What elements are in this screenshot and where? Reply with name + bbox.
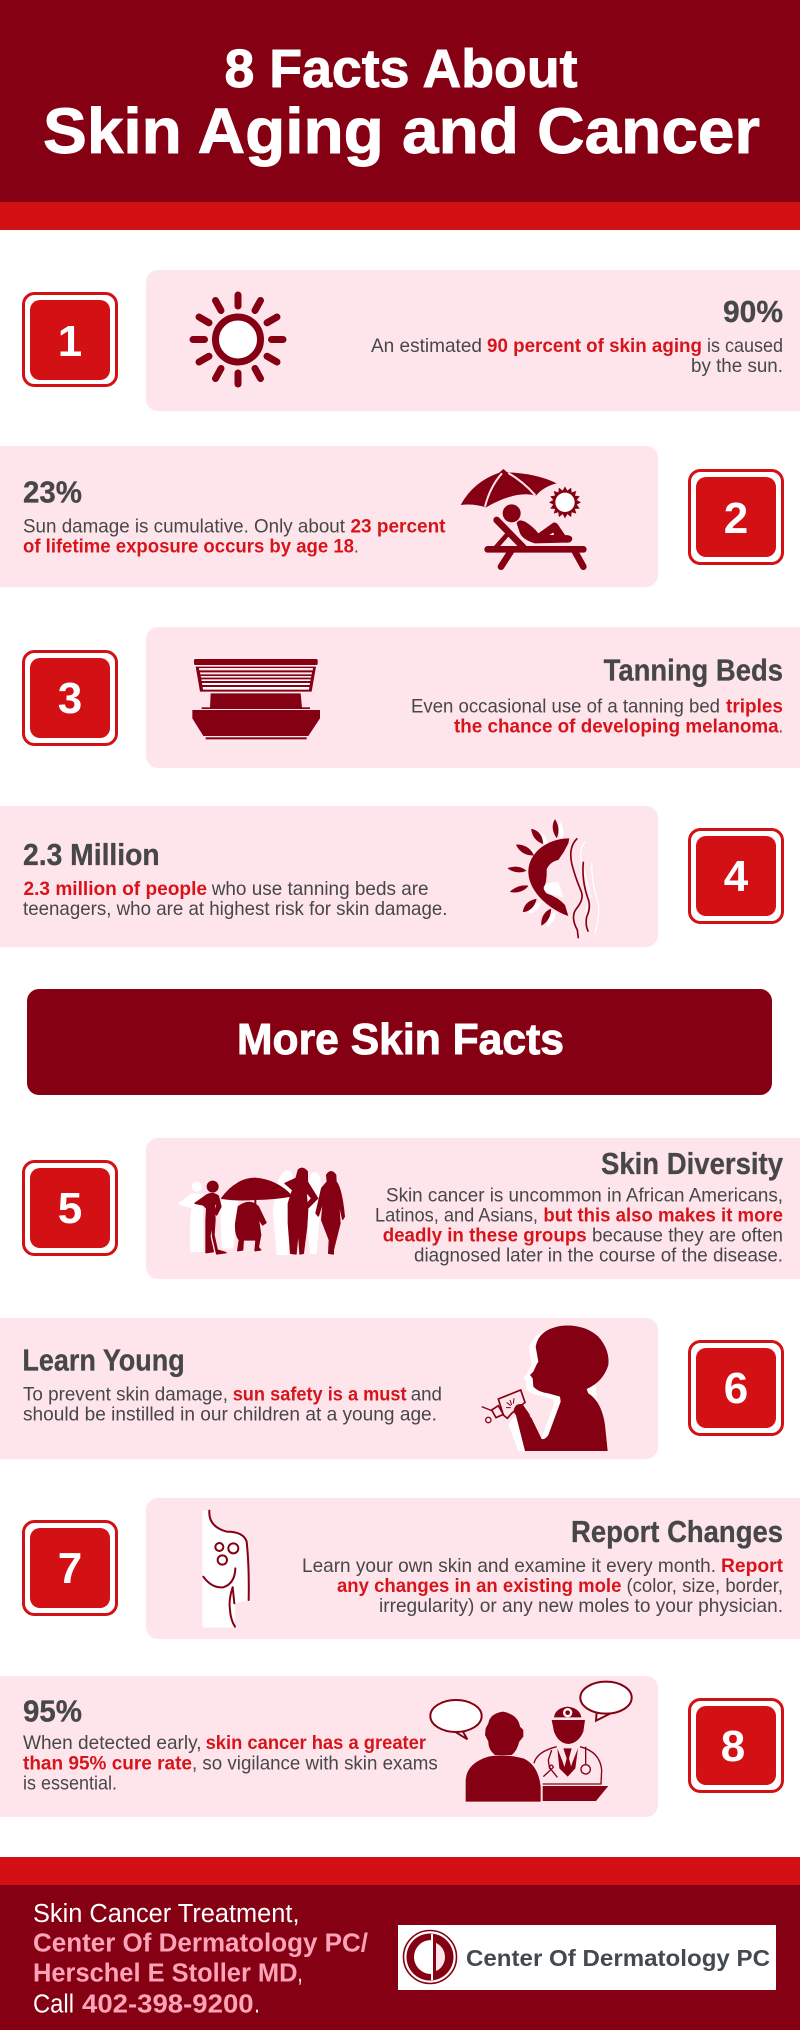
fact 4: [0, 806, 782, 947]
badge 3: 3: [58, 674, 82, 723]
text block 8: , so vigilance with skin exams: [192, 1752, 438, 1774]
text block 1: An estimated: [371, 335, 482, 357]
badge 6: [690, 1342, 782, 1434]
icon: group under umbrella: [178, 1168, 344, 1255]
fact 3: [24, 627, 800, 768]
text block 6: sun safety is a must: [233, 1384, 407, 1406]
fact 7: [24, 1498, 800, 1639]
text block 3: [411, 695, 783, 737]
badge 6: 6: [724, 1364, 748, 1413]
text block 7: Learn your own skin and examine it every month.: [302, 1555, 716, 1577]
badge 4: [690, 830, 782, 922]
panel 1: [146, 270, 800, 411]
header banner: [0, 0, 800, 230]
section banner: More Skin Facts: [27, 989, 772, 1095]
text block 1: 90 percent of skin aging: [487, 335, 702, 357]
heading: Learn Young: Learn Young: [22, 1343, 185, 1378]
text block 8: When detected early,: [23, 1732, 202, 1754]
text block 3: .: [779, 715, 783, 737]
panel 8: [0, 1676, 658, 1817]
heading: 95%: 95%: [23, 1693, 82, 1728]
text block 5: deadly in these groups: [383, 1225, 587, 1247]
title: Skin Aging and Cancer: [43, 95, 760, 167]
badge 2: [690, 470, 782, 564]
badge 5: [24, 1162, 116, 1254]
text block 7: irregularity) or any new moles to your physician.: [379, 1595, 783, 1617]
text block 5: Skin cancer is uncommon in African Americans,: [386, 1185, 783, 1207]
text block 8: is essential.: [23, 1772, 117, 1794]
badge 8: [690, 1700, 782, 1792]
text block 3: Even occasional use of a tanning bed: [411, 695, 720, 717]
panel 6: [0, 1318, 658, 1459]
text block 6: should be instilled in our children at a young age.: [23, 1404, 437, 1426]
heading: 23%: 23%: [23, 475, 82, 510]
heading: Skin Diversity: Skin Diversity: [601, 1146, 784, 1181]
text block 8: skin cancer has a greater: [206, 1732, 426, 1754]
footer text: Herschel E Stoller MD: [33, 1960, 298, 1988]
footer text: Call: [33, 1990, 74, 2018]
text block 1: [371, 335, 783, 377]
heading: 90%: 90%: [723, 294, 783, 329]
icon: sun: [193, 295, 283, 384]
icon: patient and doctor conversation: [430, 1682, 632, 1802]
text block 2: .: [354, 536, 359, 558]
fact 5: [24, 1138, 800, 1279]
footer: [0, 1857, 800, 2030]
text block 8: [23, 1732, 438, 1794]
badge 3: [24, 652, 116, 744]
text block 5: [375, 1185, 783, 1267]
badge 2: 2: [724, 494, 748, 543]
logo: [398, 1925, 776, 1990]
text block 3: triples: [726, 695, 783, 717]
panel 4: [0, 806, 658, 947]
text block 7: Report: [721, 1555, 783, 1577]
text block 5: diagnosed later in the course of the disease.: [414, 1245, 783, 1267]
section banner: More Skin Facts: More Skin Facts: [237, 1015, 564, 1064]
text block 2: of lifetime exposure occurs by age 18: [23, 536, 354, 558]
footer text: Skin Cancer Treatment,: [33, 1900, 300, 1928]
title: [43, 39, 760, 167]
icon: skin moles on torso: [202, 1511, 249, 1628]
text block 3: the chance of developing melanoma: [454, 715, 779, 737]
text block 4: teenagers, who are at highest risk for skin damage.: [23, 898, 448, 920]
icon: tanning bed: [192, 659, 320, 739]
text block 1: by the sun.: [691, 355, 783, 377]
text block 5: but this also makes it more: [543, 1205, 783, 1227]
fact 2: [0, 446, 782, 587]
text block 4: [23, 878, 448, 920]
footer text: [33, 1900, 368, 2018]
text block 4: who use tanning beds are: [211, 878, 429, 900]
text block 2: [23, 516, 446, 558]
badge 7: 7: [58, 1544, 82, 1593]
badge 1: [24, 294, 116, 386]
text block 4: 2.3 million of people: [24, 878, 207, 900]
badge 8: 8: [721, 1722, 745, 1771]
heading: 2.3 Million: 2.3 Million: [23, 837, 160, 872]
panel 7: [146, 1498, 800, 1639]
text block 5: because they are often: [592, 1225, 783, 1247]
footer text: ,: [298, 1960, 302, 1988]
panel 3: [146, 627, 800, 768]
badge 4: 4: [724, 852, 749, 901]
title: 8 Facts About: [224, 39, 578, 99]
text block 8: than 95% cure rate: [23, 1752, 192, 1774]
panel 2: [0, 446, 658, 587]
footer text: 402-398-9200: [82, 1990, 254, 2018]
fact 1: [24, 270, 800, 411]
badge 1: 1: [58, 317, 82, 366]
text block 6: and: [411, 1384, 442, 1406]
text block 6: To prevent skin damage,: [23, 1384, 228, 1406]
footer text: .: [254, 1990, 260, 2018]
text block 2: Sun damage is cumulative. Only about: [23, 516, 346, 538]
logo wordmark: Center Of Dermatology PC: [466, 1945, 770, 1971]
fact 6: [0, 1318, 782, 1459]
text block 7: any changes in an existing mole: [337, 1575, 622, 1597]
panel 5: [146, 1138, 800, 1279]
badge 7: [24, 1522, 116, 1614]
icon: sun and face profile: [508, 820, 599, 938]
icon: beach umbrella and lounger: [461, 469, 583, 567]
text block 5: Latinos, and Asians,: [375, 1205, 538, 1227]
icon: logo emblem: [404, 1930, 456, 1984]
text block 2: 23 percent: [350, 516, 446, 538]
text block 7: [302, 1555, 783, 1617]
text block 1: is caused: [707, 335, 783, 357]
text block 7: (color, size, border,: [626, 1575, 783, 1597]
badge 5: 5: [58, 1184, 82, 1233]
text block 6: [23, 1384, 442, 1426]
icon: child applying sunscreen: [482, 1326, 609, 1451]
fact 8: [0, 1676, 782, 1817]
footer text: Center Of Dermatology PC/: [33, 1930, 368, 1958]
